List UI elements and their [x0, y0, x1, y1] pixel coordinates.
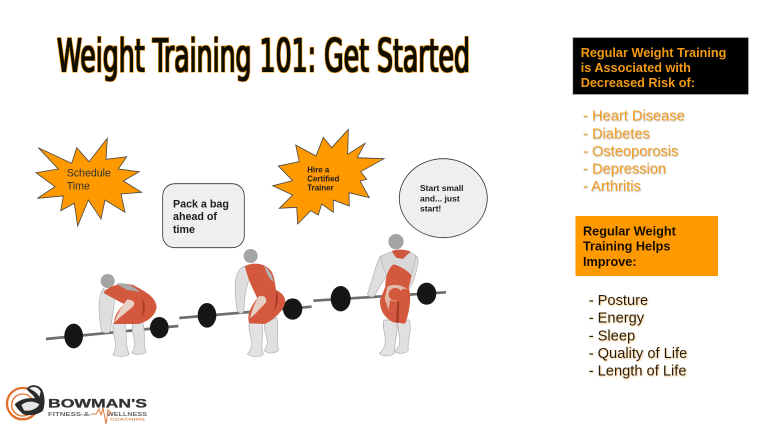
list: decreased risk conditions: - Diabetes — [583, 126, 650, 142]
callout: pack a bag rounded box — [163, 184, 244, 248]
callout: schedule time starburst — [36, 138, 142, 226]
panel: helps improve heading: Training Helps — [583, 240, 670, 254]
list: improved qualities: - Energy — [589, 311, 645, 327]
list: decreased risk conditions — [583, 109, 685, 195]
panel: helps improve heading: Improve: — [583, 255, 637, 269]
logo: Bowman's Fitness & Wellness Coaching: COACHING — [110, 418, 145, 422]
title: Weight Training 101: Get Started — [57, 30, 470, 82]
callout: start small ellipse: and... just — [420, 193, 460, 203]
callout: schedule time starburst: Schedule — [67, 168, 111, 180]
panel: helps improve heading: Regular Weight — [583, 224, 677, 238]
icon: pulse line — [92, 408, 112, 424]
list: improved qualities: - Sleep — [589, 328, 635, 344]
logo: Bowman's Fitness & Wellness Coaching — [7, 385, 147, 424]
illustration: deadlift standing position — [313, 234, 446, 356]
panel: decreased risk heading: is Associated with — [581, 61, 691, 75]
list: decreased risk conditions: - Depression — [583, 162, 666, 178]
logo: Bowman's Fitness & Wellness Coaching: FITNESS-&- — [48, 412, 92, 418]
callout: hire a certified trainer starburst: Trainer — [307, 183, 334, 192]
callout: start small ellipse — [399, 159, 487, 238]
list: decreased risk conditions: - Arthritis — [583, 179, 641, 195]
callout: hire a certified trainer starburst: Hire a — [307, 166, 330, 175]
list: improved qualities: - Length of Life — [589, 364, 686, 380]
callout: start small ellipse: Start small — [420, 183, 463, 193]
logo: Bowman's Fitness & Wellness Coaching: WELLNESS — [107, 412, 147, 418]
callout: schedule time starburst: Time — [67, 180, 90, 192]
callout: pack a bag rounded box: ahead of — [173, 211, 217, 223]
callout: pack a bag rounded box: time — [173, 224, 195, 236]
list: improved qualities: - Quality of Life — [589, 346, 687, 362]
illustration: deadlift mid position — [179, 249, 312, 356]
callout: pack a bag rounded box: Pack a bag — [173, 198, 229, 210]
callout: hire a certified trainer starburst — [273, 129, 384, 224]
logo: Bowman's Fitness & Wellness Coaching: BOWMAN'S — [48, 396, 147, 410]
list: decreased risk conditions: - Osteoporosis — [583, 144, 678, 160]
list: improved qualities — [589, 293, 687, 380]
panel: decreased risk heading — [573, 38, 748, 94]
callout: hire a certified trainer starburst: Certified — [307, 175, 339, 184]
panel: decreased risk heading: Decreased Risk of: — [581, 76, 695, 90]
illustration: deadlift start position — [46, 274, 178, 356]
icon: flexed arm in orange ring — [7, 385, 45, 419]
list: decreased risk conditions: - Heart Disease — [583, 109, 685, 125]
panel: decreased risk heading: Regular Weight Training — [581, 46, 726, 60]
panel: helps improve heading — [576, 216, 718, 276]
callout: start small ellipse: start! — [420, 204, 441, 214]
list: improved qualities: - Posture — [589, 293, 648, 309]
